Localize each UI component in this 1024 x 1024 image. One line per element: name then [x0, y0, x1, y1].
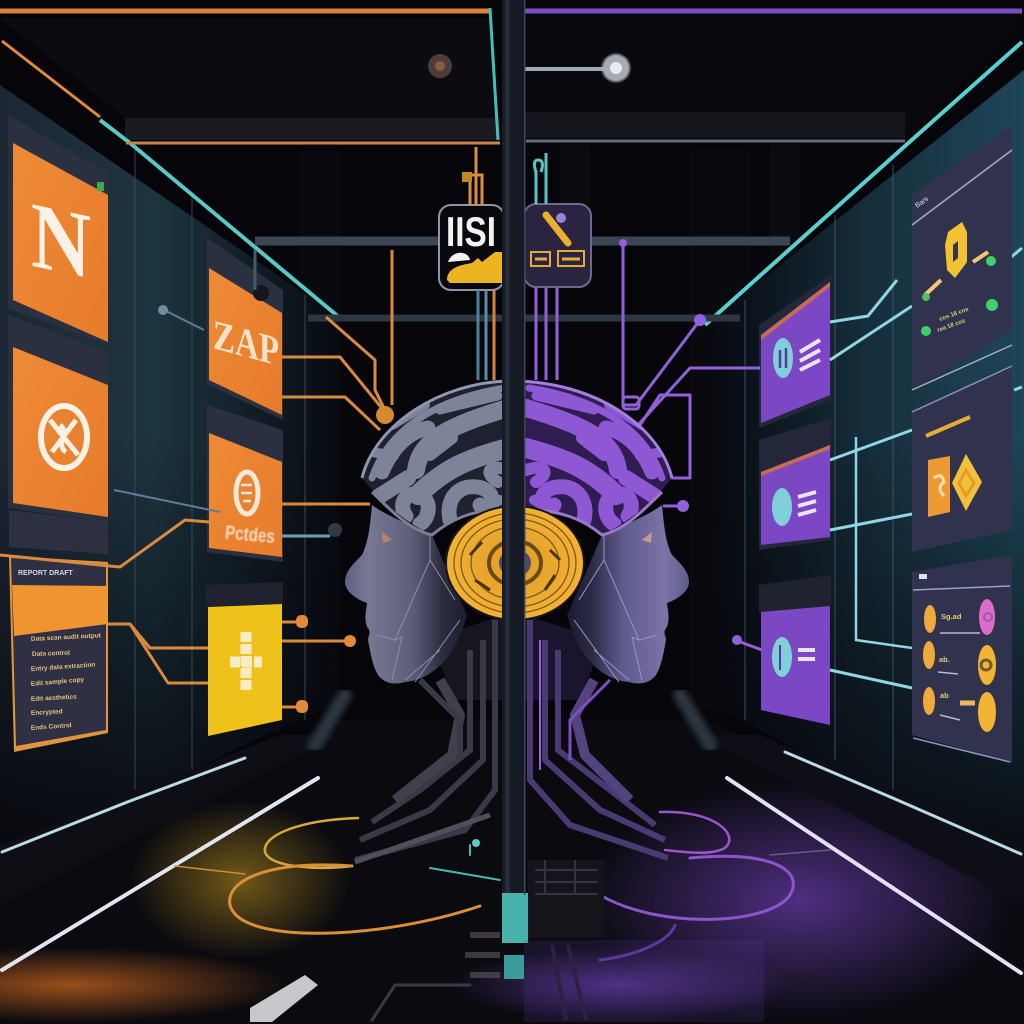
tile connectors — [462, 147, 546, 380]
connector nodes right — [619, 239, 742, 645]
face: right — [567, 505, 689, 684]
far-right panel: icon list — [912, 555, 1012, 763]
left panel: text list: Ends Control — [31, 722, 72, 732]
brain: right hemisphere — [514, 381, 672, 535]
ceiling structure — [0, 8, 1024, 325]
ceiling sensor nodes — [428, 54, 630, 82]
left panel: text list: Edit sample copy — [31, 676, 85, 688]
cyan connectors right — [830, 248, 1022, 688]
left panel: text list: Data control — [32, 650, 70, 658]
far-right panel: hexagon chart — [912, 125, 1012, 390]
left wall — [0, 85, 340, 860]
icon tile: left: IISI — [446, 208, 496, 255]
left-middle panel: yellow plus — [206, 582, 283, 736]
left panel: text list: REPORT DRAFT — [18, 570, 74, 577]
right wall — [705, 70, 1024, 870]
left-middle panel: Pctdes: Pctdes — [224, 523, 276, 548]
neck left: cables — [355, 620, 495, 862]
brain: left hemisphere — [362, 381, 510, 535]
far-right panel: hexagon chart: Bars — [914, 195, 930, 210]
icon tile: left — [439, 205, 504, 290]
far-right panel: icon list: ab. — [939, 655, 950, 664]
purple connectors — [536, 242, 762, 650]
left panel: text list: Entry data extraction — [31, 661, 96, 673]
far-right panel: hexagon chart: rea 18 cos — [937, 318, 967, 334]
face: left — [345, 505, 467, 684]
left panel: text list — [9, 556, 108, 752]
far-right panel: icon list: ab — [940, 691, 949, 700]
far-right panel: hexagon chart: cos 18 cos — [939, 307, 970, 323]
left panel: N: N — [31, 182, 91, 299]
left panel: text list: Data scan audit output — [31, 632, 102, 643]
floor — [0, 720, 1024, 1024]
right-middle panel: bottom purple — [759, 575, 831, 725]
neck backing — [430, 615, 604, 700]
base machine — [465, 860, 764, 1022]
icon tile: right — [524, 204, 591, 287]
left-middle panel: ZAP: ZAP — [213, 312, 279, 376]
left panel: text list: Edit aesthetics — [31, 694, 77, 703]
left dark strip panel — [9, 510, 108, 554]
floor light strips — [2, 695, 1021, 1022]
back wall vertical slats — [300, 145, 800, 710]
left-middle panel: ZAP — [207, 238, 283, 420]
far-right panel: icon list: Sg.ad — [941, 612, 962, 621]
far-right panel: shield icons — [912, 365, 1012, 552]
yellow disc core — [445, 505, 585, 621]
floor circuit loops — [175, 812, 830, 960]
left-middle panel: Pctdes — [207, 405, 283, 562]
connector nodes left — [158, 250, 394, 713]
left panel: text list: Encrypted — [31, 708, 63, 717]
left panel: circular icon — [8, 315, 108, 522]
orange connectors — [0, 250, 392, 707]
left panel: N — [8, 115, 108, 345]
right-middle panel: top purple — [759, 275, 831, 428]
neck right: cables — [530, 620, 668, 858]
right-middle panel: mid purple — [759, 418, 831, 550]
central divider pole — [502, 0, 528, 979]
